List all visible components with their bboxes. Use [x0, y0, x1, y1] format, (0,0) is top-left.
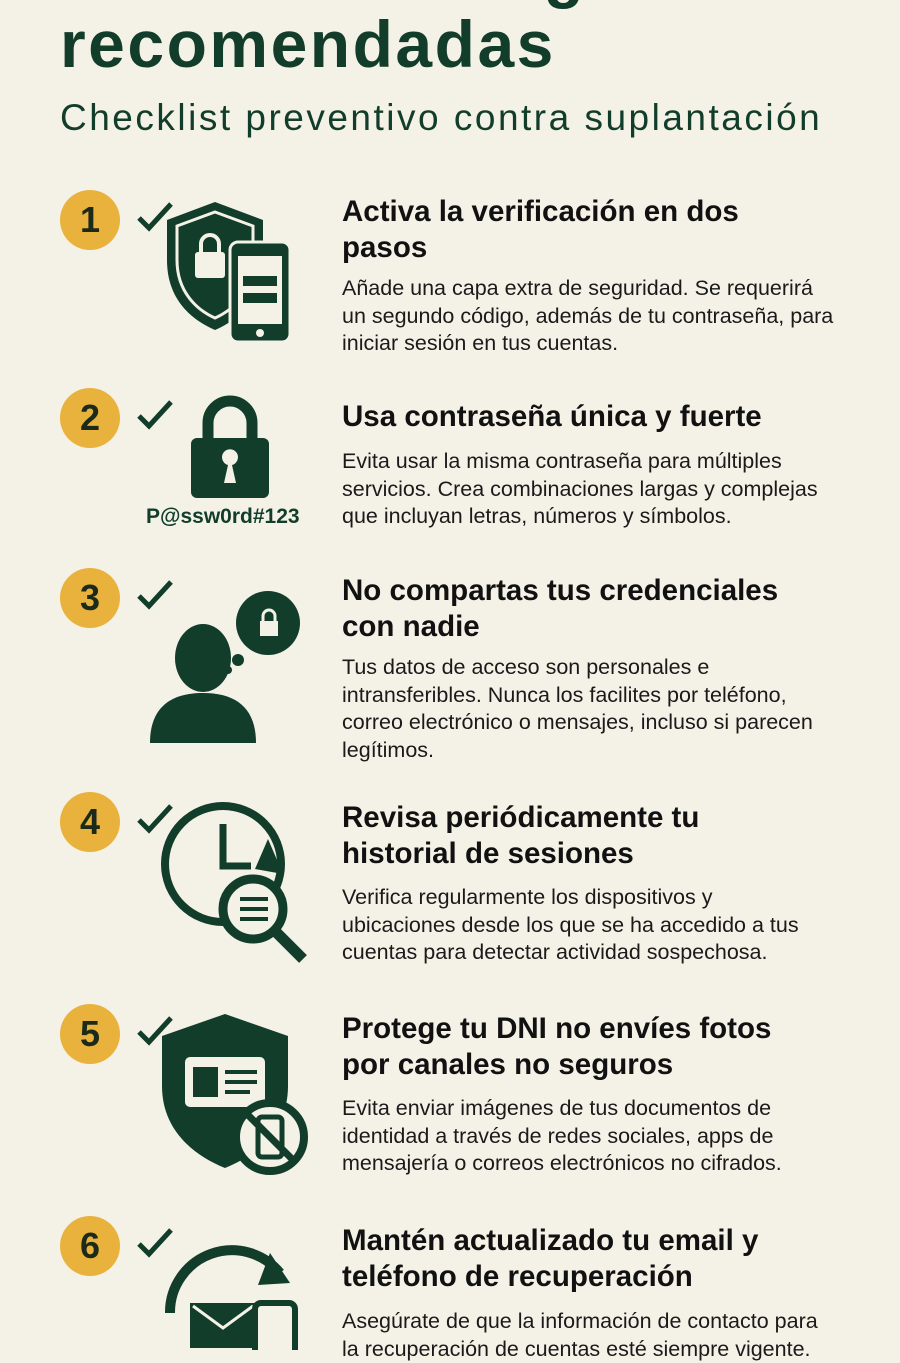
icon: shield and phone	[167, 202, 288, 340]
number 2: 2	[80, 397, 100, 438]
text 2: servicios. Crea combinaciones largas y complejas	[342, 476, 818, 500]
text 6: la recuperación de cuentas esté siempre vigente.	[342, 1336, 810, 1360]
title	[60, 0, 803, 81]
text 3: intransferibles. Nunca los facilites por teléfono,	[342, 682, 787, 706]
text 2	[342, 449, 818, 528]
heading 6: teléfono de recuperación	[342, 1260, 693, 1293]
subtitle: Checklist preventivo contra suplantación	[60, 97, 822, 138]
heading 6: Mantén actualizado tu email y	[342, 1224, 758, 1257]
text 2: que incluyan letras, números y símbolos.	[342, 504, 732, 528]
text 3	[342, 655, 813, 762]
text 1: iniciar sesión en tus cuentas.	[342, 331, 618, 355]
icon: shield with ID and no-phone	[162, 1014, 308, 1175]
item 5	[60, 1004, 782, 1175]
item 3	[60, 568, 813, 762]
text 6	[342, 1309, 818, 1360]
item 6	[60, 1216, 818, 1360]
number 2	[60, 388, 120, 448]
check 4	[137, 804, 173, 834]
number 6	[60, 1216, 120, 1276]
heading 5: Protege tu DNI no envíes fotos	[342, 1012, 771, 1045]
number 5: 5	[80, 1013, 100, 1054]
heading 3: con nadie	[342, 610, 480, 643]
heading 3: No compartas tus credenciales	[342, 574, 778, 607]
text 5	[342, 1096, 782, 1175]
heading 4	[342, 801, 699, 870]
number 3: 3	[80, 577, 100, 618]
text 5: Evita enviar imágenes de tus documentos de	[342, 1096, 771, 1120]
number 6: 6	[80, 1225, 100, 1266]
text 3: Tus datos de acceso son personales e	[342, 655, 709, 679]
number 5	[60, 1004, 120, 1064]
text 5: identidad a través de redes sociales, apps de	[342, 1124, 773, 1148]
title: recomendadas	[60, 7, 556, 81]
item 4	[60, 792, 799, 964]
check 5	[137, 1016, 173, 1046]
heading 4: Revisa periódicamente tu	[342, 801, 699, 834]
item 2	[60, 388, 818, 528]
text 6: Asegúrate de que la información de contacto para	[342, 1309, 818, 1333]
text 4: Verifica regularmente los dispositivos y	[342, 885, 712, 909]
text 2: Evita usar la misma contraseña para múltiples	[342, 449, 782, 473]
check 6	[137, 1228, 173, 1258]
text 3: correo electrónico o mensajes, incluso si parecen	[342, 710, 813, 734]
number 1	[60, 190, 120, 250]
text 5: mensajería o correos electrónicos no cifrados.	[342, 1151, 782, 1175]
text 4: cuentas para detectar actividad sospechosa.	[342, 940, 768, 964]
icon: email and phone sync	[165, 1245, 298, 1350]
heading 4: historial de sesiones	[342, 837, 634, 870]
heading 1: pasos	[342, 231, 427, 264]
heading 5	[342, 1012, 771, 1081]
icon: clock and magnifier	[161, 802, 307, 963]
heading 1: Activa la verificación en dos	[342, 195, 739, 228]
number 4: 4	[80, 801, 100, 842]
password text: P@ssw0rd#123	[146, 505, 300, 528]
number 4	[60, 792, 120, 852]
number 3	[60, 568, 120, 628]
heading 2: Usa contraseña única y fuerte	[342, 400, 762, 433]
heading 5: por canales no seguros	[342, 1048, 673, 1081]
heading 3	[342, 574, 778, 643]
item 1	[60, 190, 834, 355]
number 1: 1	[80, 199, 100, 240]
text 4	[342, 885, 799, 964]
heading 1	[342, 195, 739, 264]
text 4: ubicaciones desde los que se ha accedido a tus	[342, 912, 799, 936]
text 1: un segundo código, además de tu contraseña, para	[342, 304, 833, 328]
check 1	[137, 202, 173, 232]
text 1	[342, 276, 834, 355]
icon: person with thought lock	[150, 591, 300, 743]
heading 6	[342, 1224, 758, 1293]
text 3: legítimos.	[342, 738, 434, 762]
icon: padlock	[191, 396, 269, 498]
text 1: Añade una capa extra de seguridad. Se requerirá	[342, 276, 813, 300]
check 3	[137, 580, 173, 610]
check 2	[137, 400, 173, 430]
